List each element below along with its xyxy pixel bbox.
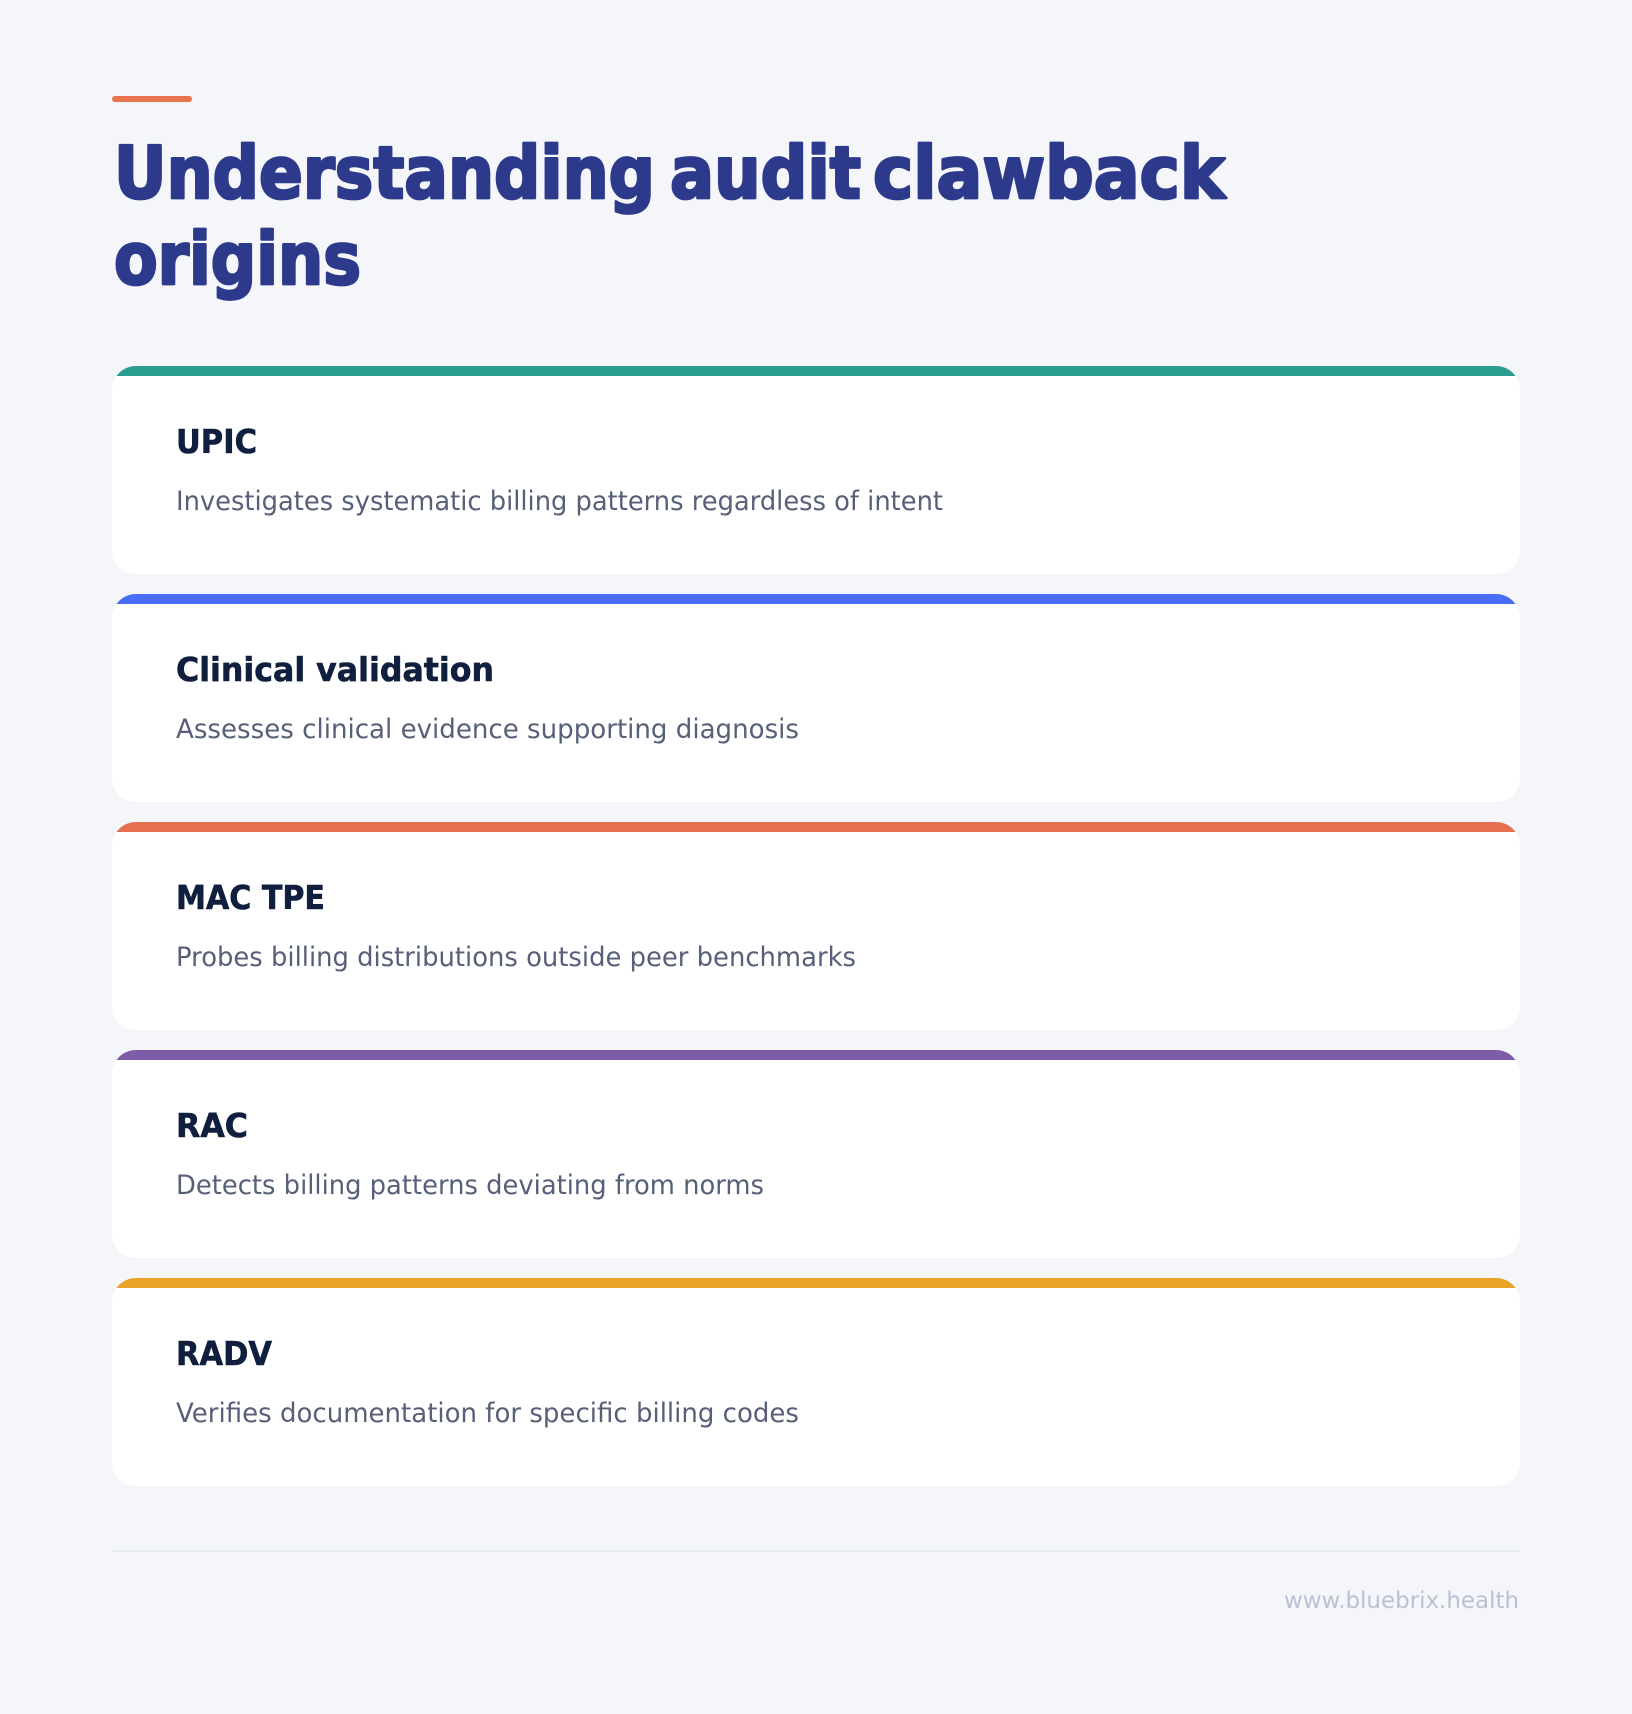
description: MAC TPE: Probes billing distributions outside peer benchmarks: [176, 942, 856, 973]
panel: Clinical validation: [112, 594, 1520, 802]
description: RADV: Verifies documentation for specific billing codes: [176, 1398, 799, 1429]
title: origins: [114, 217, 361, 301]
footer url: www.bluebrix.health: [1284, 1588, 1519, 1614]
description: RAC: Detects billing patterns deviating from norms: [176, 1170, 764, 1201]
title: clawback: [873, 131, 1227, 215]
title: audit: [670, 131, 861, 215]
heading: UPIC: UPIC: [176, 422, 257, 461]
description: Clinical validation: Assesses clinical evidence supporting diagnosis: [176, 714, 799, 745]
title: [114, 131, 1227, 301]
panel: RAC: [112, 1050, 1520, 1258]
description: UPIC: Investigates systematic billing patterns regardless of intent: [176, 486, 943, 517]
panel: RADV: [112, 1278, 1520, 1486]
heading: RADV: RADV: [176, 1334, 272, 1373]
heading: MAC TPE: MAC TPE: [176, 878, 325, 917]
panel: MAC TPE: [112, 822, 1520, 1030]
panel: UPIC: [112, 366, 1520, 574]
accent bar: [112, 96, 192, 102]
heading: Clinical validation: Clinical validation: [176, 650, 494, 689]
heading: RAC: RAC: [176, 1106, 248, 1145]
title: Understanding: [114, 131, 655, 215]
